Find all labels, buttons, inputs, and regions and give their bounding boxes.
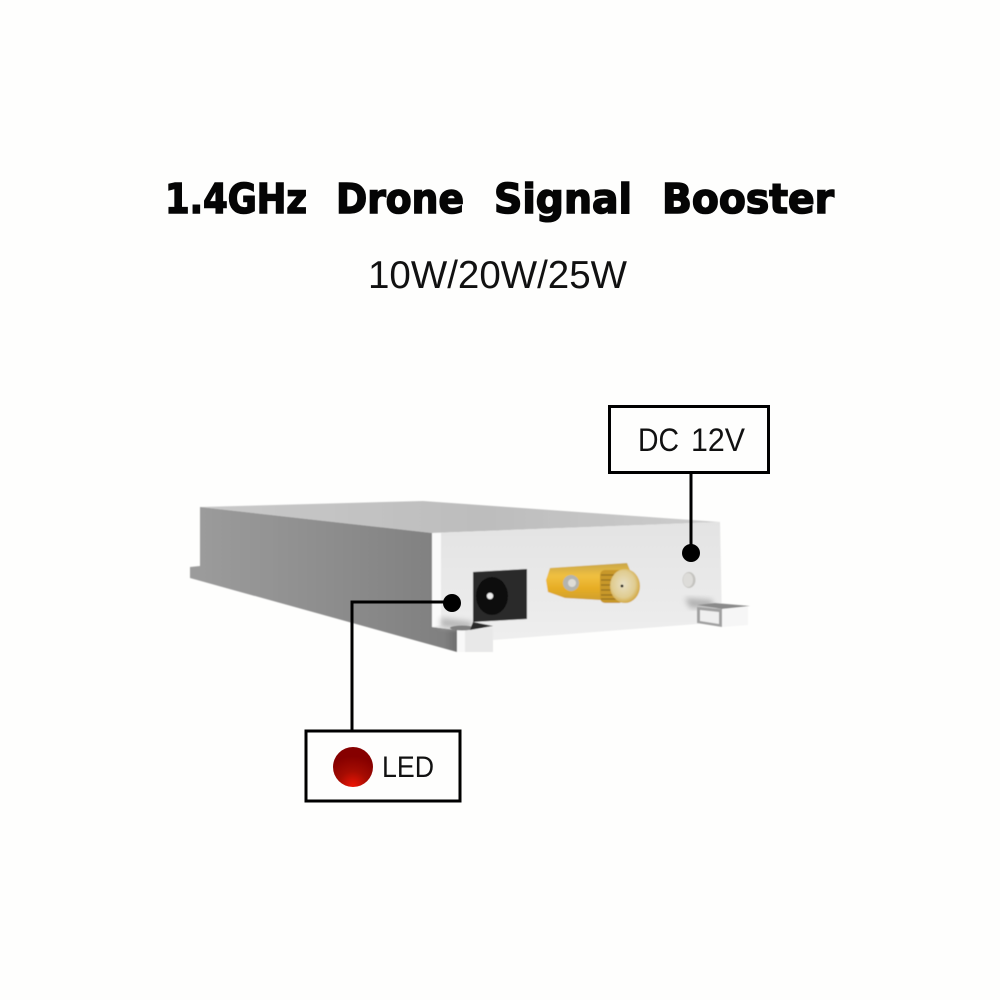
callout: DC 12V: 12V [691, 422, 746, 458]
callout: DC 12V [610, 406, 768, 562]
title: Drone [336, 175, 464, 223]
indicator light [682, 572, 696, 588]
icon: red LED [333, 747, 373, 787]
title: 1.4GHz [165, 175, 307, 223]
front panel [432, 522, 722, 640]
subtitle: 10W/20W/25W [368, 254, 627, 297]
top surface [200, 501, 720, 533]
callout: DC 12V: DC [638, 422, 679, 458]
product: signal booster device [190, 501, 750, 652]
SMA gold connector [546, 563, 640, 603]
power jack [473, 569, 527, 622]
left mounting foot [441, 618, 493, 652]
title: Signal [494, 175, 632, 223]
title: Booster [662, 175, 835, 223]
title [165, 175, 835, 223]
left side panel [190, 507, 457, 652]
callout: LED [306, 594, 461, 801]
callout: LED: LED [382, 751, 434, 784]
right mounting foot [685, 598, 750, 627]
